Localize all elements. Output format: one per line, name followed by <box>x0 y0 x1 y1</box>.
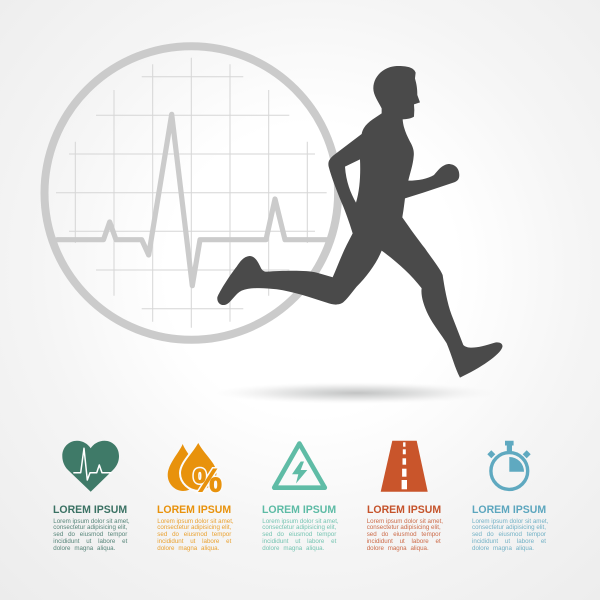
icon: water drops with percent <box>168 443 222 494</box>
column: triangle text: LOREM IPSUM <box>262 504 336 516</box>
column: stopwatch text: incididunt ut labore et <box>472 538 546 545</box>
column: triangle text: Lorem ipsum dolor sit amet, <box>262 518 339 524</box>
dial grid <box>56 58 327 328</box>
column: triangle text: incididunt ut labore et <box>262 538 336 545</box>
column: road text: dolore magna aliqua. <box>367 545 429 552</box>
column: triangle text: dolore magna aliqua. <box>262 545 324 552</box>
icon: stopwatch <box>487 440 531 492</box>
column: stopwatch text: LOREM IPSUM <box>472 504 546 516</box>
ECG dial <box>44 46 338 340</box>
column: road text <box>367 504 443 552</box>
ground shadow <box>212 382 502 404</box>
column: heart text: LOREM IPSUM <box>53 504 127 516</box>
column: drops text: incididunt ut labore et <box>157 538 231 545</box>
column: drops text: consectetur adipisicing elit, <box>157 524 231 531</box>
column: heart text: Lorem ipsum dolor sit amet, <box>53 518 130 524</box>
column: triangle text <box>262 504 339 552</box>
column: heart text: consectetur adipisicing elit, <box>53 524 127 531</box>
column: road text: LOREM IPSUM <box>367 504 441 516</box>
illustration: ECG dial, runner and shadow <box>40 42 502 402</box>
column: heart text <box>53 504 130 552</box>
column: triangle text: consectetur adipisicing elit, <box>262 524 336 531</box>
icon: heart with pulse <box>62 440 119 492</box>
column: road text: sed do eiusmod tempor <box>367 531 441 538</box>
heartbeat trace <box>57 114 327 286</box>
column: drops text: dolore magna aliqua. <box>157 545 219 552</box>
column: stopwatch text: dolore magna aliqua. <box>472 545 534 552</box>
column: road text: Lorem ipsum dolor sit amet, <box>367 518 443 524</box>
column: drops text: sed do eiusmod tempor <box>157 531 231 538</box>
column: heart text: incididunt ut labore et <box>53 538 127 545</box>
column: road text: consectetur adipisicing elit, <box>367 524 441 531</box>
column: road text: incididunt ut labore et <box>367 538 441 545</box>
column: triangle text: sed do eiusmod tempor <box>262 531 336 538</box>
column: stopwatch text: sed do eiusmod tempor <box>472 531 546 538</box>
icon: warning triangle with lightning <box>272 441 328 490</box>
column: stopwatch text: consectetur adipisicing elit, <box>472 524 546 531</box>
runner silhouette <box>217 66 502 378</box>
column: stopwatch text <box>472 504 548 552</box>
column: drops text: Lorem ipsum dolor sit amet, <box>157 518 234 524</box>
column: stopwatch text: Lorem ipsum dolor sit amet, <box>472 518 548 524</box>
column: heart text: sed do eiusmod tempor <box>53 531 127 538</box>
column: drops text: LOREM IPSUM <box>157 504 231 516</box>
column: heart text: dolore magna aliqua. <box>53 545 115 552</box>
column: drops text <box>157 504 234 552</box>
dial ring <box>44 46 338 340</box>
icon: road <box>380 440 428 492</box>
